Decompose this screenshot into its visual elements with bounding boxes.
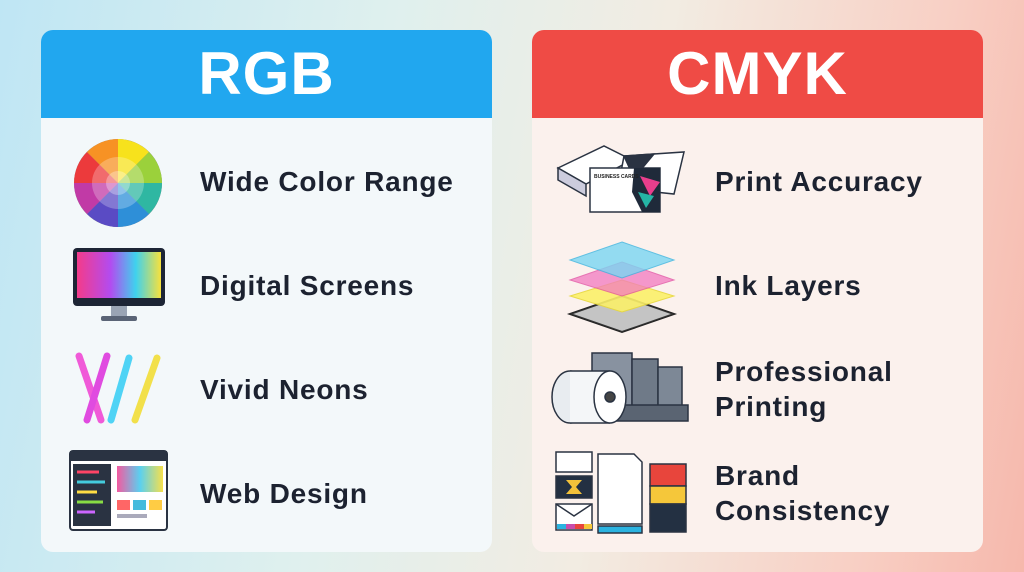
icon: monitor: [73, 248, 165, 321]
label: Brand Consistency: [715, 460, 890, 526]
label: Professional Printing: Printing: [715, 391, 827, 422]
icon: business cards: BUSINESS CARDS: [594, 174, 639, 180]
icon: brand items: [555, 451, 687, 534]
icon: color wheel: [74, 139, 162, 227]
icon: neons: [76, 352, 160, 424]
heading: CMYK: CMYK: [667, 40, 848, 107]
icon: ink layers: [567, 242, 677, 333]
panel: RGB: [41, 30, 492, 552]
label: Ink Layers: Ink Layers: [715, 270, 862, 301]
label: Wide Color Range: Wide Color Range: [200, 166, 454, 197]
label: Brand Consistency: Brand: [715, 460, 800, 491]
heading: RGB: RGB: [198, 40, 335, 107]
icon: printing press: [551, 352, 689, 424]
label: Digital Screens: Digital Screens: [200, 270, 414, 301]
label: Web Design: Web Design: [200, 478, 368, 509]
icon: web design: [69, 450, 168, 531]
panel: CMYK: [532, 30, 983, 552]
label: Professional Printing: Professional: [715, 356, 893, 387]
label: Professional Printing: [715, 356, 893, 422]
label: Vivid Neons: Vivid Neons: [200, 374, 369, 405]
label: Print Accuracy: Print Accuracy: [715, 166, 923, 197]
heading: CMYK: [532, 30, 983, 118]
heading: RGB: [41, 30, 492, 118]
icon: business cards: [556, 145, 685, 213]
label: Brand Consistency: Consistency: [715, 495, 890, 526]
